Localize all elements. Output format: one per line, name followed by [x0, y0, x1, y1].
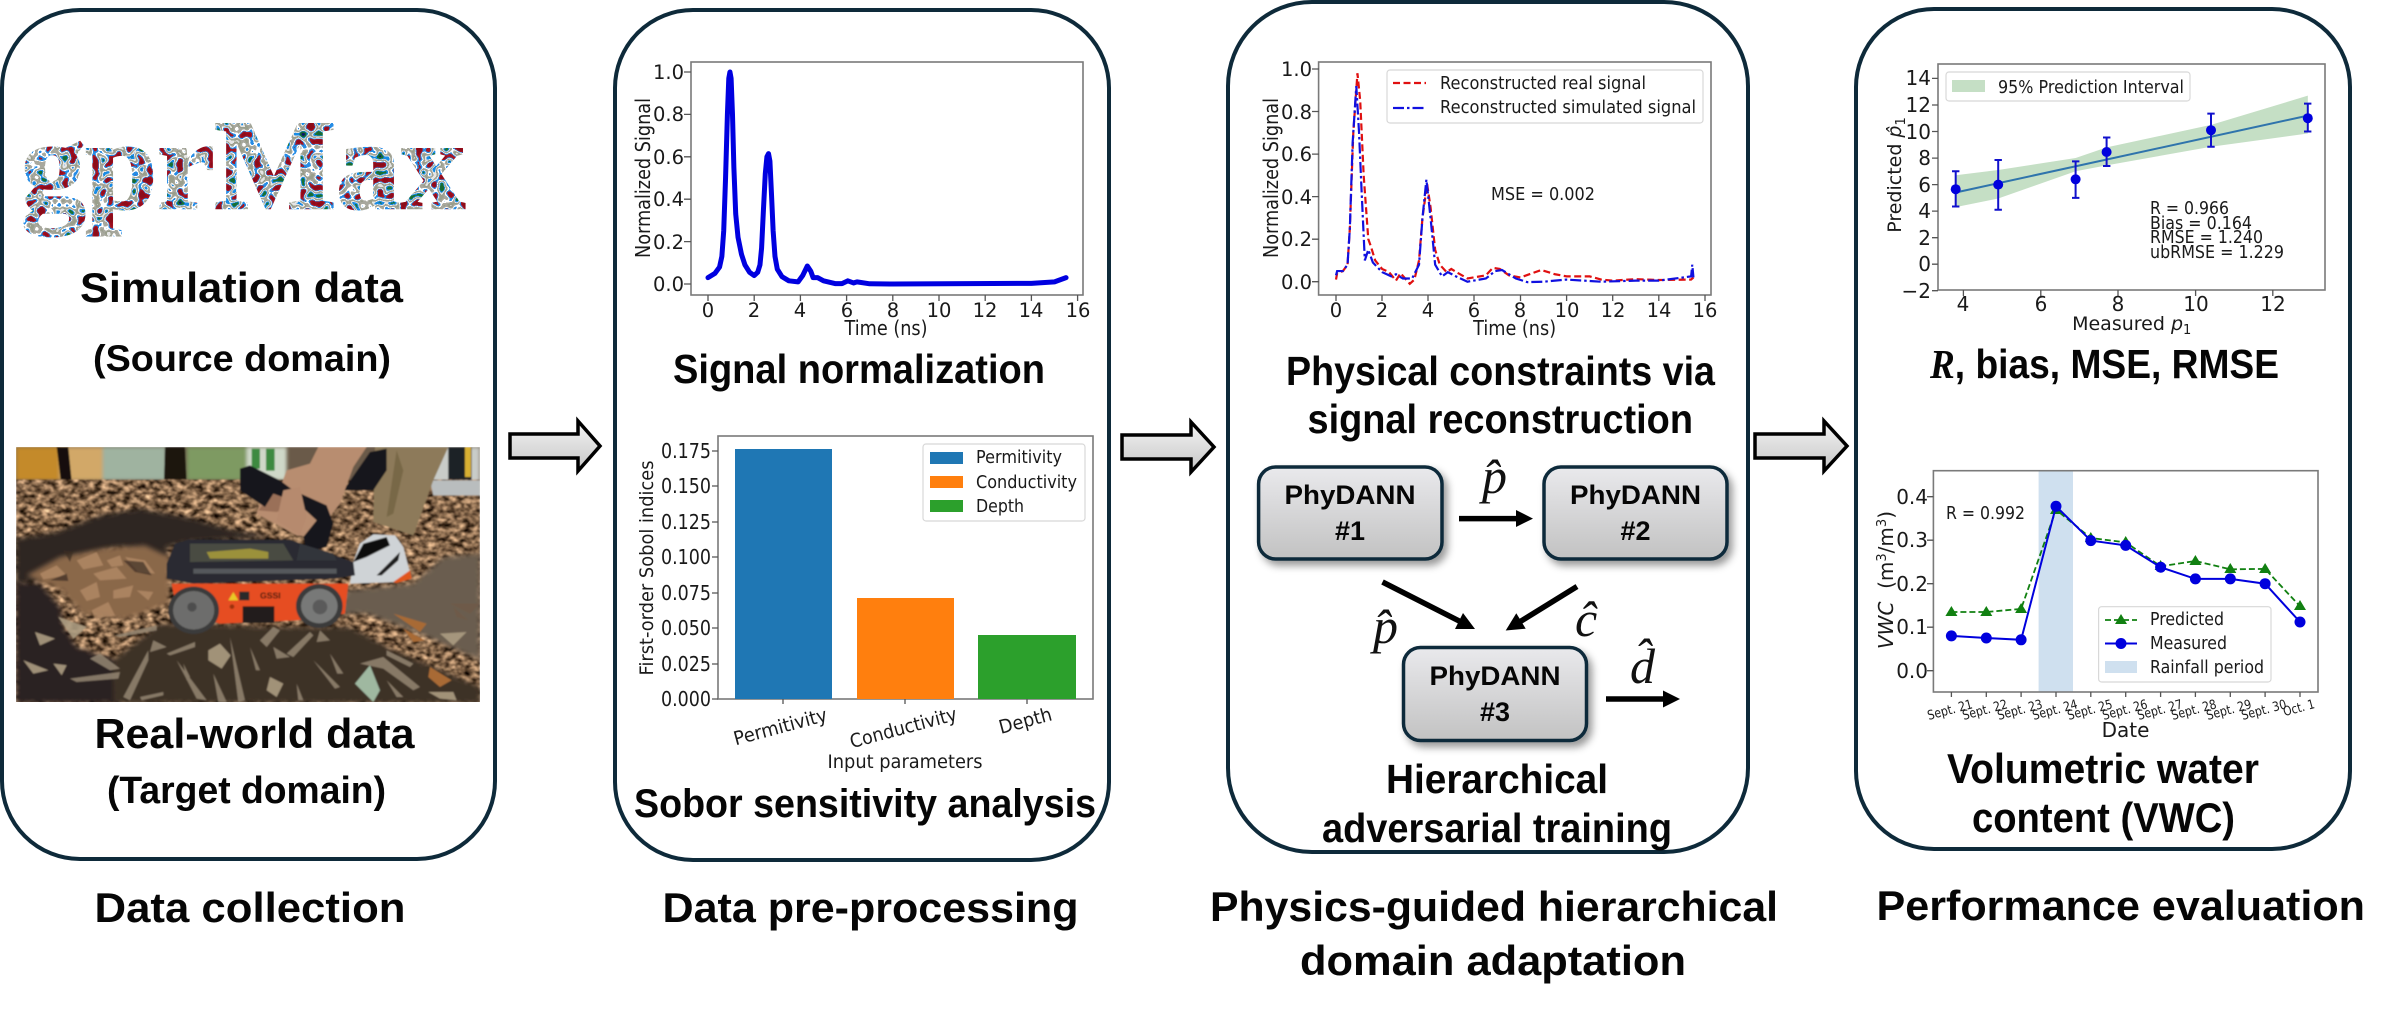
chart: reconstructed signals: 0 [1330, 299, 1342, 322]
chart: normalized signal line [631, 61, 1090, 340]
chart: reconstructed signals: 0.6 [1281, 143, 1312, 166]
chart: volumetric water content time series: Sept. 21 [1926, 697, 1974, 724]
chart: volumetric water content time series: Sept. 25 [2066, 697, 2114, 724]
chart: volumetric water content time series: Sept. 24 [2031, 697, 2079, 724]
chart: Sobol indices bars [636, 436, 1093, 773]
chart: predicted vs measured regression: 12 [1906, 93, 1931, 117]
chart: predicted vs measured regression: 4 [1918, 199, 1931, 223]
chart: reconstructed signals: Time (ns) [1472, 316, 1556, 340]
chart: predicted vs measured regression: 8 [1918, 146, 1931, 170]
chart: volumetric water content time series [1874, 471, 2318, 742]
chart: normalized signal line: 0.6 [653, 146, 684, 169]
arrow: 2 to 3 with c-hat [1506, 586, 1598, 647]
arrow: pre-processing to adaptation [1122, 422, 1214, 472]
chart: normalized signal line: 2 [748, 299, 760, 322]
chart: volumetric water content time series: 0.1 [1896, 615, 1928, 639]
chart: reconstructed signals: 0.0 [1281, 271, 1312, 294]
legend: prediction interval [1946, 72, 2190, 101]
node: PhyDANN 2 [1544, 467, 1727, 559]
chart: normalized signal line: 0.4 [653, 188, 684, 211]
legend: prediction interval: 95% Prediction Interval [1998, 77, 2184, 98]
heading: real-world data: Real-world data [94, 710, 415, 757]
chart: predicted vs measured regression: 10 [1906, 120, 1931, 144]
heading: physical constraints [1286, 348, 1716, 442]
chart: predicted vs measured regression: 4 [1957, 292, 1969, 316]
chart: normalized signal line: 8 [887, 299, 899, 322]
legend: VWC series: Rainfall period [2150, 657, 2264, 678]
chart: volumetric water content time series: Sept. 30 [2240, 697, 2288, 724]
annotation: regression statistics: RMSE = 1.240 [2150, 227, 2263, 248]
chart: Sobol indices bars: 0.075 [661, 581, 711, 605]
chart: predicted vs measured regression: Measured p [2072, 313, 2183, 335]
heading: volumetric water content: Volumetric water [1947, 745, 2259, 792]
legend: VWC series: Predicted [2150, 609, 2224, 630]
chart: reconstructed signals: 6 [1468, 299, 1480, 322]
panel: data pre-processing [615, 10, 1109, 860]
chart: volumetric water content time series: /m [1874, 527, 1898, 553]
chart: volumetric water content time series: Sept. 28 [2170, 697, 2218, 724]
node: PhyDANN 1: #1 [1335, 516, 1365, 546]
panel: performance evaluation [1856, 9, 2350, 849]
chart: normalized signal line: 0.0 [653, 273, 684, 296]
heading: target domain: (Target domain) [107, 770, 386, 812]
chart: Sobol indices bars: Input parameters [828, 751, 982, 773]
chart: Sobol indices bars: 0.025 [661, 652, 711, 676]
chart: normalized signal line: 14 [1019, 299, 1043, 322]
chart: reconstructed signals: 14 [1647, 299, 1671, 322]
chart: volumetric water content time series: 0.2 [1896, 572, 1928, 596]
chart: normalized signal line: 4 [794, 299, 806, 322]
chart: normalized signal line: 0 [702, 299, 714, 322]
heading: hierarchical adversarial training [1322, 756, 1672, 851]
chart: Sobol indices bars: 0.125 [661, 510, 711, 534]
chart: volumetric water content time series: Sept. 29 [2205, 697, 2253, 724]
icon: gprMax logo: gprMax [21, 94, 465, 236]
arrow: adaptation to evaluation [1755, 421, 1847, 471]
annotation: MSE: MSE = 0.002 [1491, 184, 1595, 205]
chart: predicted vs measured regression [1884, 64, 2325, 338]
chart: volumetric water content time series: 0.0 [1896, 659, 1928, 683]
chart: Sobol indices bars: 0.175 [661, 439, 711, 463]
chart: normalized signal line: 10 [927, 299, 951, 322]
chart: normalized signal line: 16 [1066, 299, 1090, 322]
heading: volumetric water content: content (VWC) [1972, 794, 2235, 841]
caption: physics-guided hierarchical domain adaptation [1210, 883, 1778, 984]
chart: Sobol indices bars: 0.000 [661, 687, 711, 711]
chart: Sobol indices bars: Permitivity [731, 704, 830, 750]
chart: reconstructed signals [1259, 58, 1717, 340]
legend: VWC series [2099, 607, 2271, 682]
heading: metrics: R, bias, MSE, RMSE [1929, 341, 2279, 387]
heading: hierarchical adversarial training: adversarial training [1322, 805, 1672, 851]
caption: data collection: Data collection [94, 884, 406, 931]
arrow: 1 to 3 with p-hat: p̂ [1370, 598, 1398, 654]
arrow: 1 to 2 with p-hat [1459, 448, 1533, 527]
chart: Sobol indices bars: First-order Sobol indices [636, 460, 658, 676]
legend: Sobol parameters: Permitivity [976, 447, 1062, 468]
panel: physics-guided hierarchical domain adaptation [1228, 2, 1748, 852]
chart: predicted vs measured regression: 2 [1918, 226, 1931, 250]
node: PhyDANN 3: #3 [1480, 697, 1510, 727]
chart: Sobol indices bars: 0.150 [661, 474, 711, 498]
chart: Sobol indices bars: Conductivity [847, 703, 959, 753]
node: PhyDANN 3 [1404, 648, 1586, 740]
chart: normalized signal line: 12 [973, 299, 997, 322]
chart: predicted vs measured regression: 0 [1918, 252, 1931, 276]
chart: volumetric water content time series: Sept. 23 [1996, 697, 2044, 724]
chart: Sobol indices bars: 0.100 [661, 545, 711, 569]
chart: predicted vs measured regression: 1 [2183, 323, 2191, 338]
node: PhyDANN 2: PhyDANN [1570, 480, 1701, 510]
legend: reconstructed signals: Reconstructed real signal [1440, 73, 1646, 94]
chart: normalized signal line: 0.8 [653, 103, 684, 126]
arrow: 2 to 3 with c-hat: ĉ [1575, 591, 1598, 647]
annotation: regression statistics: R = 0.966 [2150, 198, 2229, 219]
chart: normalized signal line: Time (ns) [844, 316, 928, 340]
chart: reconstructed signals: 16 [1693, 299, 1717, 322]
chart: predicted vs measured regression: 12 [2260, 292, 2286, 316]
chart: volumetric water content time series: Sept. 22 [1961, 697, 2009, 724]
heading: physical constraints: Physical constraints via [1286, 348, 1716, 394]
arrow: output d-hat [1606, 637, 1680, 708]
chart: Sobol indices bars: 0.050 [661, 616, 711, 640]
chart: volumetric water content time series: VWC (m [1874, 562, 1898, 649]
chart: reconstructed signals: 4 [1422, 299, 1434, 322]
chart: reconstructed signals: 8 [1514, 299, 1526, 322]
chart: volumetric water content time series: 3 [1875, 553, 1890, 562]
node: PhyDANN 2: #2 [1620, 516, 1651, 546]
legend: Sobol parameters: Depth [976, 496, 1024, 517]
node: PhyDANN 3: PhyDANN [1430, 661, 1560, 691]
heading: Sobor sensitivity analysis: Sobor sensitivity analysis [634, 782, 1096, 826]
annotation: regression statistics: Bias = 0.164 [2150, 213, 2252, 234]
chart: predicted vs measured regression: 14 [1906, 66, 1931, 90]
image: GPR cart on leaf-covered ground [16, 447, 480, 703]
arrow: output d-hat: d̂ [1630, 637, 1656, 694]
heading: simulation data: Simulation data [80, 264, 404, 311]
annotation: regression statistics [2150, 198, 2284, 263]
caption: performance evaluation: Performance evaluation [1876, 882, 2365, 929]
heading: physical constraints: signal reconstruction [1308, 396, 1693, 442]
chart: volumetric water content time series: Sept. 26 [2101, 697, 2149, 724]
legend: Sobol parameters [923, 444, 1085, 521]
legend: reconstructed signals: Reconstructed simulated signal [1440, 97, 1696, 118]
legend: Sobol parameters: Conductivity [976, 472, 1077, 493]
arrow: collection to pre-processing [510, 421, 600, 471]
annotation: correlation: R = 0.992 [1946, 503, 2025, 524]
diagram: PhyDANN hierarchy [1259, 448, 1727, 740]
chart: reconstructed signals: 0.2 [1281, 228, 1312, 251]
chart: reconstructed signals: 10 [1555, 299, 1579, 322]
chart: predicted vs measured regression: 10 [2183, 292, 2209, 316]
annotation: regression statistics: ubRMSE = 1.229 [2150, 242, 2284, 263]
chart: volumetric water content time series: Date [2102, 718, 2149, 742]
chart: reconstructed signals: 0.8 [1281, 101, 1312, 124]
chart: predicted vs measured regression: Predicted p̂ [1884, 125, 1906, 233]
chart: reconstructed signals: Normalized Signal [1259, 98, 1283, 258]
node: PhyDANN 1: PhyDANN [1284, 480, 1416, 510]
node: PhyDANN 1 [1259, 467, 1442, 559]
chart: normalized signal line: 1.0 [653, 61, 684, 84]
heading: source domain: (Source domain) [93, 338, 391, 379]
chart: predicted vs measured regression: 6 [1918, 173, 1931, 197]
chart: volumetric water content time series: 3 [1875, 519, 1890, 527]
chart: predicted vs measured regression: 1 [1894, 117, 1909, 125]
heading: volumetric water content [1947, 745, 2259, 841]
panel: data collection [2, 10, 495, 859]
caption: data pre-processing: Data pre-processing [662, 884, 1078, 931]
chart: reconstructed signals: 2 [1376, 299, 1388, 322]
chart: volumetric water content time series: Oct. 1 [2282, 697, 2316, 720]
arrow: 1 to 2 with p-hat: p̂ [1479, 448, 1507, 504]
chart: volumetric water content time series: 0.4 [1896, 485, 1928, 509]
chart: volumetric water content time series: 0.3 [1896, 528, 1928, 552]
chart: Sobol indices bars: Depth [997, 704, 1054, 739]
heading: signal normalization: Signal normalization [673, 346, 1045, 392]
caption: physics-guided hierarchical domain adaptation: Physics-guided hierarchical [1210, 883, 1778, 930]
chart: predicted vs measured regression: 6 [2035, 292, 2047, 316]
chart: predicted vs measured regression: −2 [1902, 279, 1931, 303]
chart: normalized signal line: Normalized Signal [631, 98, 655, 258]
caption: physics-guided hierarchical domain adaptation: domain adaptation [1300, 937, 1686, 984]
legend: reconstructed signals [1387, 70, 1703, 123]
chart: predicted vs measured regression: 8 [2112, 292, 2124, 316]
chart: reconstructed signals: 0.4 [1281, 186, 1312, 209]
chart: volumetric water content time series: ) [1874, 511, 1898, 519]
arrow: 1 to 3 with p-hat [1370, 582, 1475, 654]
chart: reconstructed signals: 12 [1601, 299, 1625, 322]
legend: VWC series: Measured [2150, 633, 2227, 654]
heading: hierarchical adversarial training: Hierarchical [1386, 756, 1608, 802]
chart: normalized signal line: 0.2 [653, 231, 684, 254]
chart: normalized signal line: 6 [841, 299, 853, 322]
chart: reconstructed signals: 1.0 [1281, 58, 1312, 81]
image: GPR cart on leaf-covered ground: GSSI [260, 591, 281, 601]
chart: volumetric water content time series: Sept. 27 [2136, 697, 2184, 724]
